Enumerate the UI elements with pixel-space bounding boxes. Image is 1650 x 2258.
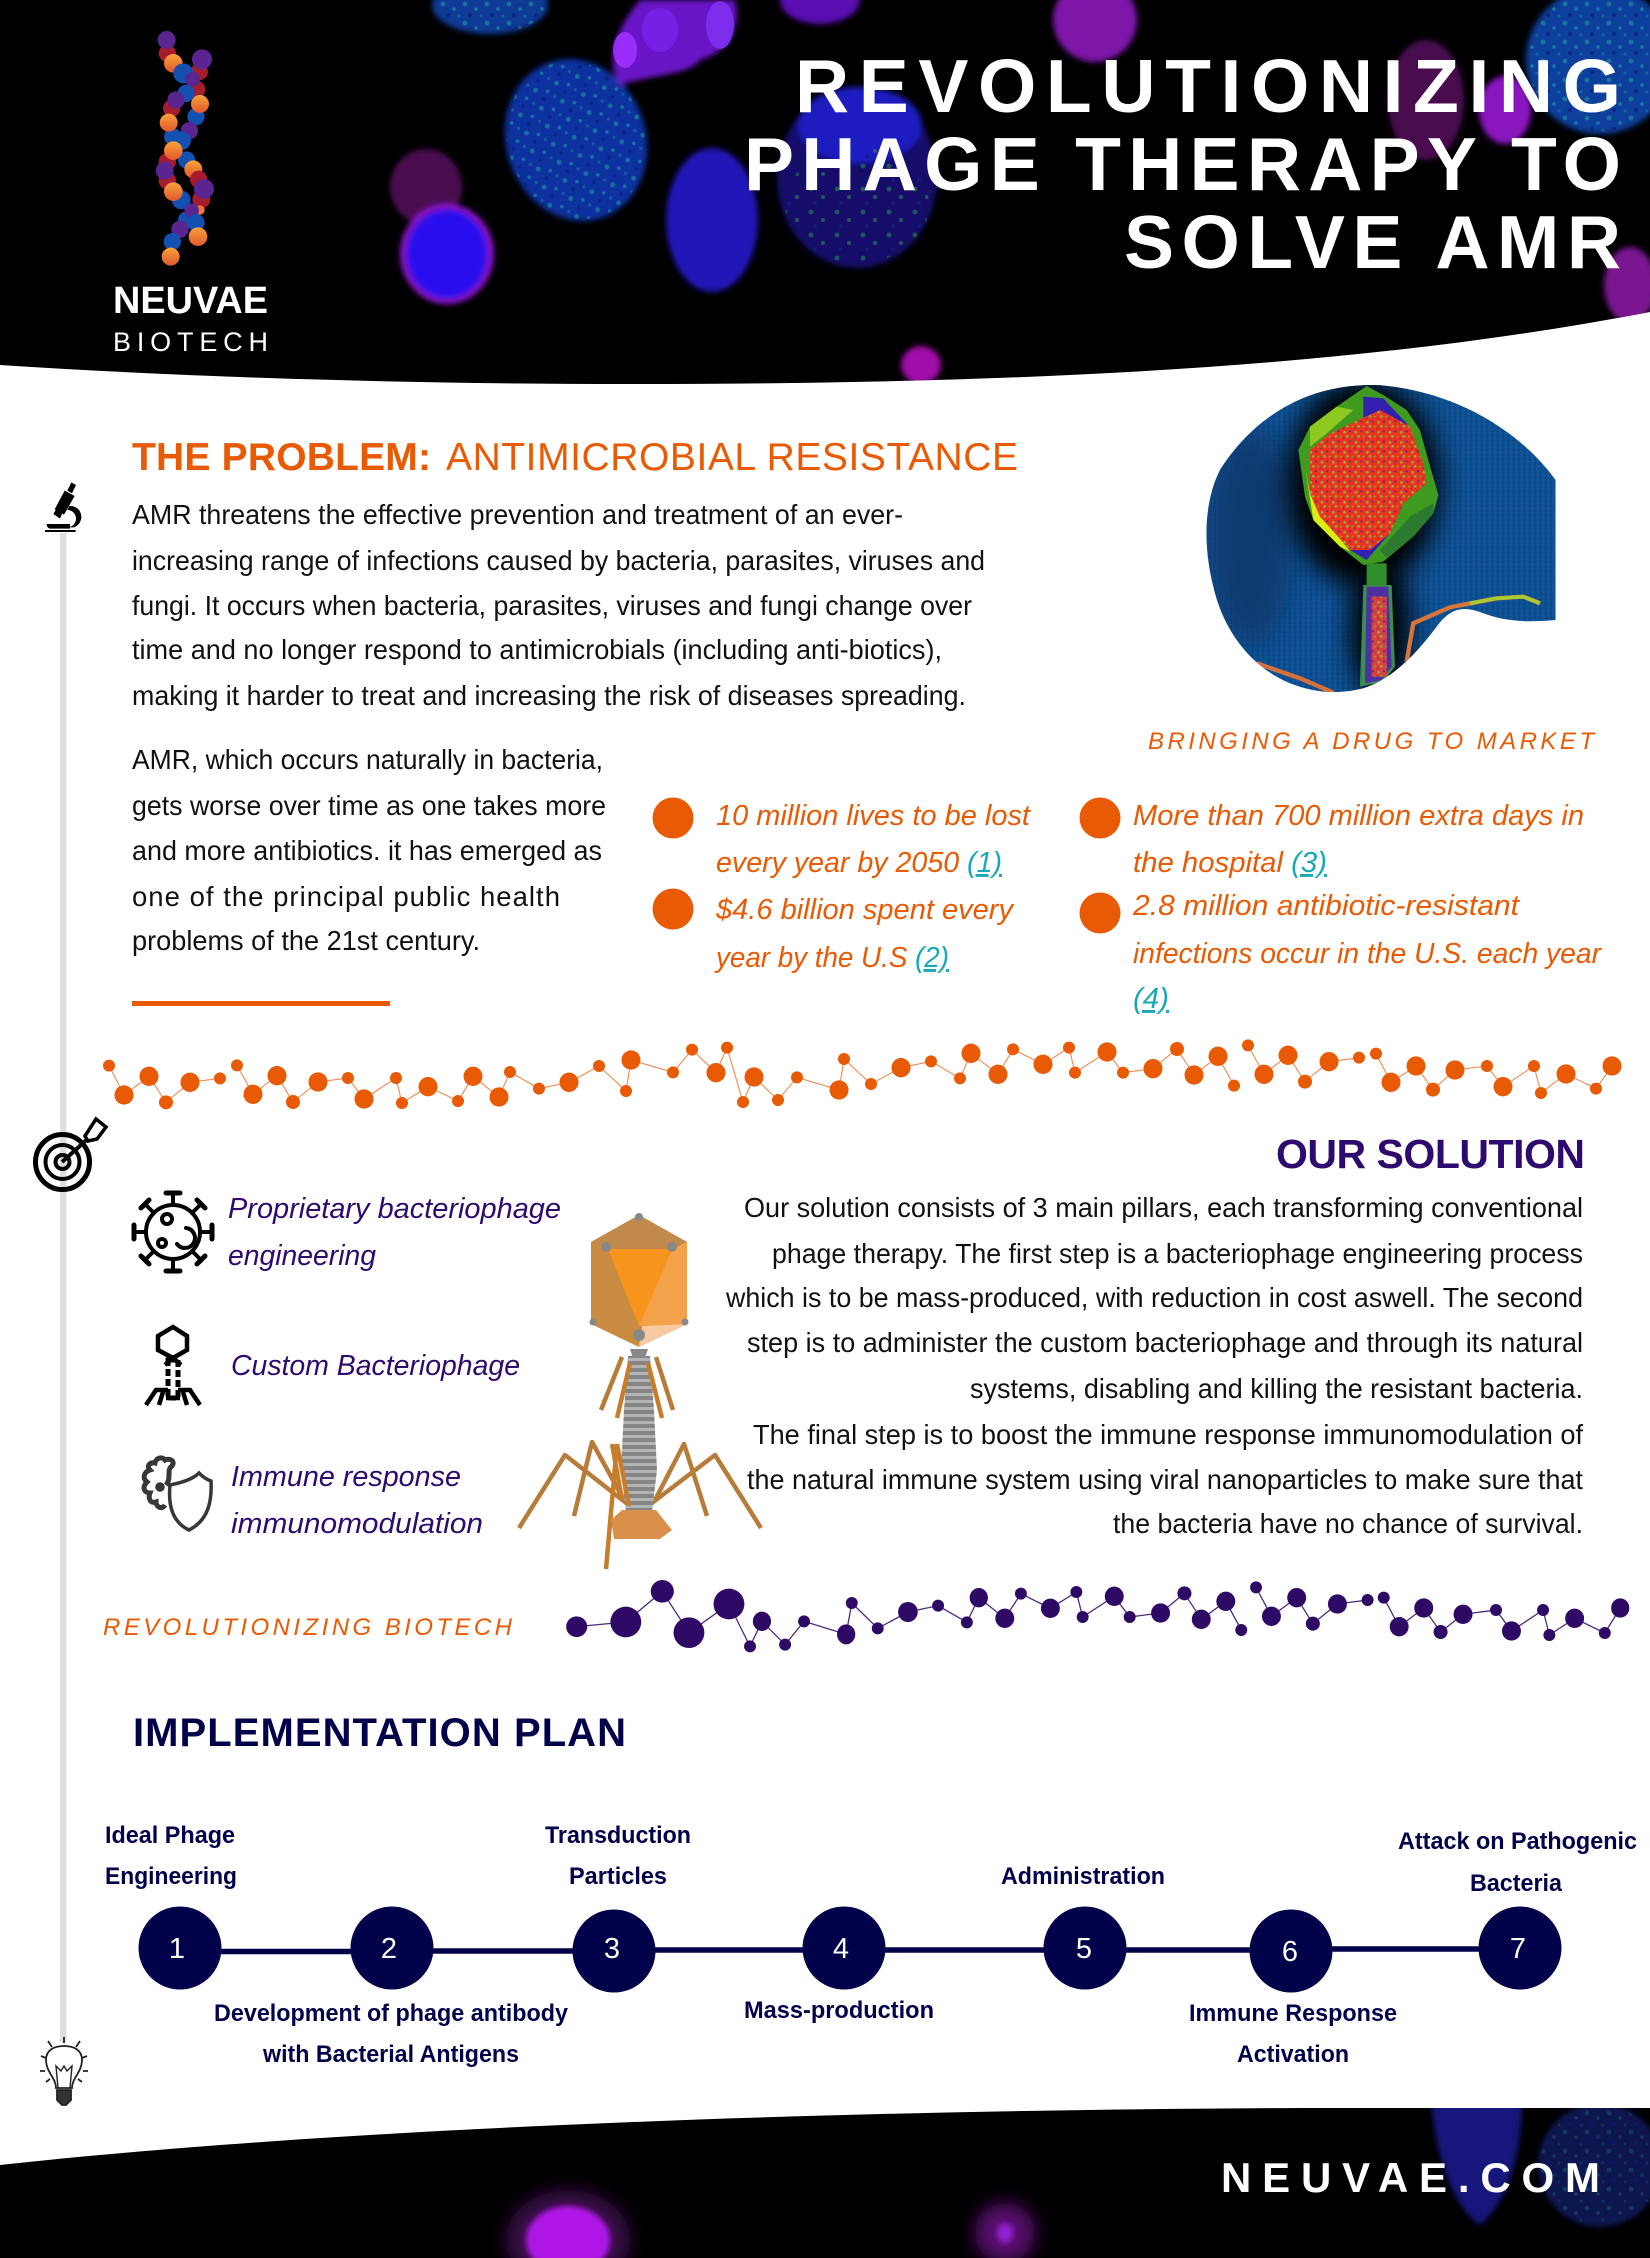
title (744, 44, 1621, 284)
text block: solution: Our solution consists of 3 main pillars, each transforming conventional (744, 1192, 1583, 1223)
step 4 (802, 1906, 886, 1990)
text block: AMR growth: gets worse over time as one takes more (132, 790, 606, 821)
text block: AMR growth: problems of the 21st century. (132, 925, 480, 956)
step 6 (1250, 1910, 1332, 1992)
label: step 7 (1398, 1828, 1637, 1897)
step 1 (138, 1906, 222, 1990)
stat: lives lost: every year by 2050 (1) (716, 847, 1002, 879)
text block: solution: the natural immune system using viral nanoparticles to make sure that (747, 1464, 1583, 1495)
step 3 (572, 1910, 656, 1992)
stat: money spent: year by the U.S (2) (714, 942, 949, 974)
phage tail (1367, 563, 1387, 587)
label: step 5: Administration (1001, 1863, 1165, 1890)
stat: hospital days: More than 700 million extra days in (1133, 800, 1584, 832)
phage tail (621, 1356, 657, 1512)
label: step 2 (214, 2000, 569, 2068)
phage head (1298, 386, 1438, 565)
step 7: 7 (1510, 1933, 1526, 1965)
header background (0, 0, 1650, 384)
icon: target (36, 1119, 106, 1190)
label: step 2: with Bacterial Antigens (262, 2041, 519, 2068)
fibers (1407, 597, 1540, 662)
step 2 (350, 1906, 434, 1990)
logo wordmark: BIOTECH (113, 327, 268, 357)
text block: solution: which is to be mass-produced, with reduction in cost aswell. The second (725, 1282, 1583, 1313)
phage legs (519, 1357, 761, 1528)
text block: solution: the bacteria have no chance of survival. (1113, 1508, 1583, 1539)
text block: solution: phage therapy. The first step is a bacteriophage engineering process (772, 1238, 1583, 1269)
icon: phage (146, 1327, 200, 1405)
text block: AMR growth (132, 744, 606, 956)
pillar: immune response (144, 1458, 483, 1540)
step 5 (1044, 1906, 1126, 1990)
label: step 7: Attack on Pathogenic (1398, 1828, 1637, 1855)
stat: infections: infections occur in the U.S. each year (1133, 938, 1602, 970)
label: step 7: Bacteria (1470, 1870, 1563, 1897)
heading: the problem: ANTIMICROBIAL RESISTANCE (446, 436, 1018, 479)
step 2: 2 (381, 1933, 397, 1965)
logo wordmark (113, 280, 268, 357)
illustration: orange bacteriophage (519, 1213, 761, 1569)
label: step 6: Activation (1237, 2041, 1349, 2068)
label: Proprietary bacteriophage (228, 1193, 561, 1225)
image: bacteriophage micrograph (1200, 377, 1560, 700)
label: step 3: Transduction (545, 1822, 691, 1849)
label: Custom Bacteriophage (231, 1350, 520, 1382)
logo wordmark: NEUVAE (113, 280, 268, 322)
label: step 1 (105, 1822, 237, 1890)
stat: lives lost: 10 million lives to be lost (716, 800, 1032, 832)
text block: AMR growth: AMR, which occurs naturally in bacteria, (132, 744, 603, 775)
stat: lives lost (652, 798, 1032, 879)
step 1: 1 (169, 1933, 185, 1965)
text block: solution: systems, disabling and killing the resistant bacteria. (970, 1373, 1583, 1404)
text block: solution: The final step is to boost the immune response immunomodulation of (753, 1419, 1583, 1450)
text block: AMR definition: increasing range of infections caused by bacteria, parasites, viruses and (132, 545, 985, 576)
purple molecule chain (566, 1580, 1629, 1652)
step 5: 5 (1076, 1933, 1092, 1965)
stat: money spent (652, 888, 1014, 974)
label: engineering (228, 1240, 376, 1272)
icon: light bulb (40, 2037, 88, 2105)
title: SOLVE AMR (1124, 200, 1621, 284)
cell cluster: microscopy background (390, 0, 1650, 384)
label: step 1: Engineering (105, 1863, 237, 1890)
implementation timeline (105, 1822, 1637, 2068)
label: immunomodulation (231, 1508, 483, 1540)
orange molecule chain (103, 1039, 1622, 1109)
title: PHAGE THERAPY TO (744, 122, 1621, 206)
text block: AMR growth: and more antibiotics. it has emerged as (132, 835, 602, 866)
label: step 2: Development of phage antibody (214, 2000, 569, 2027)
heading: our solution: OUR SOLUTION (1276, 1131, 1585, 1177)
footer background (0, 2100, 1650, 2258)
heading: the problem (132, 436, 1018, 479)
text block: AMR definition: AMR threatens the effective prevention and treatment of an ever- (132, 499, 903, 530)
label: step 6 (1189, 2000, 1397, 2068)
text block: AMR definition: making it harder to treat and increasing the risk of diseases spreading. (132, 680, 966, 711)
label (228, 1193, 561, 1272)
heading: implementation plan: IMPLEMENTATION PLAN (133, 1711, 626, 1755)
timeline rail (60, 533, 66, 2042)
pillar: proprietary engineering (134, 1193, 561, 1272)
caption: bringing a drug to market: BRINGING A DRUG TO MARKET (1148, 728, 1596, 755)
step 7 (1478, 1906, 1562, 1990)
step 6: 6 (1282, 1936, 1298, 1968)
phage base plate (611, 1510, 672, 1539)
label: Immune response (231, 1461, 461, 1493)
title: REVOLUTIONIZING (795, 44, 1621, 128)
stat: infections (1080, 890, 1602, 1015)
text block: AMR definition: time and no longer respond to antimicrobials (including anti-biotics), (132, 634, 942, 665)
text block: AMR definition: fungi. It occurs when bacteria, parasites, viruses and fungi change over (132, 590, 972, 621)
statistics bullets (652, 798, 1602, 1015)
stat: hospital days: the hospital (3) (1133, 847, 1327, 879)
text block: AMR definition (132, 499, 985, 711)
stat: infections: 2.8 million antibiotic-resistant (1132, 890, 1521, 922)
stat: money spent: $4.6 billion spent every (715, 894, 1014, 926)
icon: microscope (45, 482, 81, 532)
text block: solution: step is to administer the custom bacteriophage and through its natural (747, 1327, 1583, 1358)
text block: solution (725, 1192, 1583, 1539)
icon: dna helix (156, 31, 214, 266)
icon: virus (134, 1193, 212, 1271)
phage head (590, 1213, 688, 1358)
website url: NEUVAE.COM (1221, 2154, 1600, 2201)
logo (113, 31, 268, 357)
heading: the problem: THE PROBLEM: (132, 436, 431, 479)
pillar: custom bacteriophage (146, 1327, 520, 1405)
label (231, 1461, 483, 1540)
step 4: 4 (833, 1933, 849, 1965)
label: step 3 (545, 1822, 691, 1890)
stat: hospital days (1080, 798, 1584, 879)
stat: infections: (4) (1133, 983, 1169, 1015)
label: step 6: Immune Response (1189, 2000, 1397, 2027)
label: step 1: Ideal Phage (105, 1822, 235, 1849)
step 3: 3 (604, 1933, 620, 1965)
orange underline (132, 1001, 390, 1006)
icon: immune shield (144, 1458, 211, 1530)
label: step 4: Mass-production (744, 1997, 934, 2024)
label: step 3: Particles (569, 1863, 667, 1890)
caption: revolutionizing biotech: REVOLUTIONIZING BIOTECH (103, 1614, 513, 1641)
text block: AMR growth: one of the principal public health (132, 881, 560, 912)
